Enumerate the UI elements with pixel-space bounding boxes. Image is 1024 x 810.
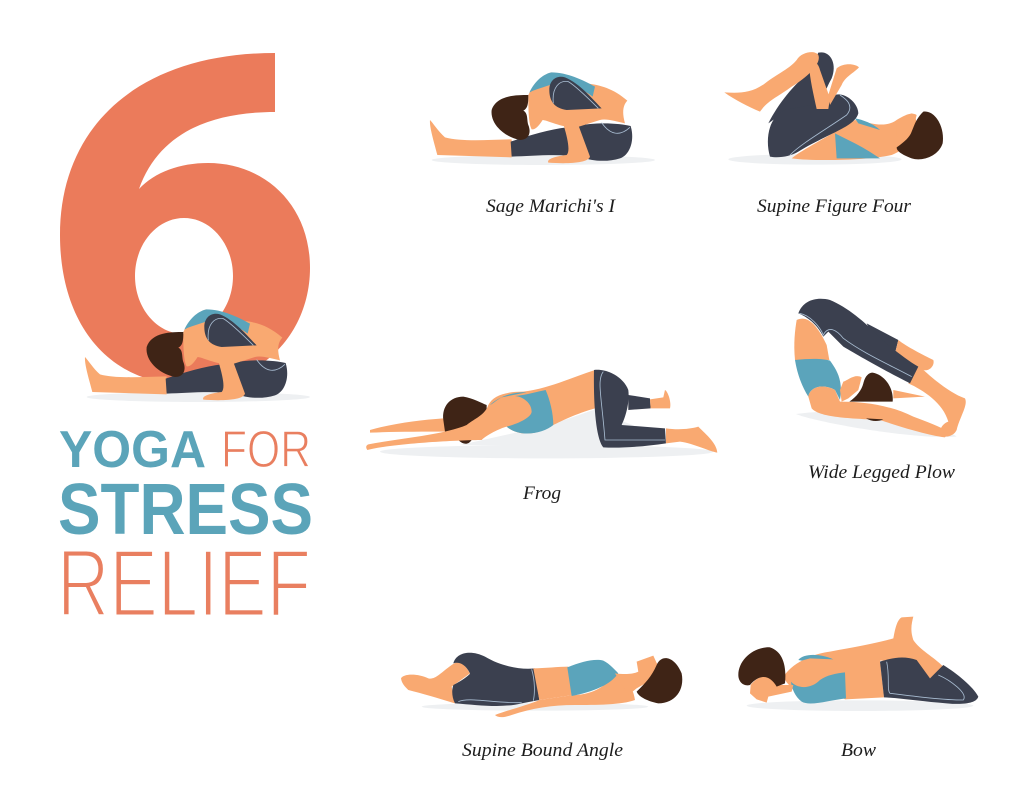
label: frog: Frog [522,483,561,504]
title: yoga for stress relief: RELIEF [57,530,311,637]
figure: wide legged plow pose [794,299,966,437]
figure: bow pose [738,617,978,711]
big number six [60,53,310,385]
label: bow: Bow [841,740,876,761]
label: supine bound angle: Supine Bound Angle [462,740,623,761]
title: yoga for stress relief: STRESS [58,470,313,550]
figure: sage marichi pose [430,72,655,165]
title: yoga for stress relief [57,421,313,637]
figure: supine figure four pose [724,52,943,165]
figure: pose on the number six [85,309,310,402]
title: yoga for stress relief: YOGA [59,421,206,479]
title: yoga for stress relief: FOR [221,421,311,479]
figure: supine bound angle pose [401,653,682,717]
label: sage marichi: Sage Marichi's I [486,196,617,217]
figure: frog pose [366,370,717,458]
label: wide legged plow: Wide Legged Plow [808,462,955,483]
label: supine figure four: Supine Figure Four [757,196,912,217]
